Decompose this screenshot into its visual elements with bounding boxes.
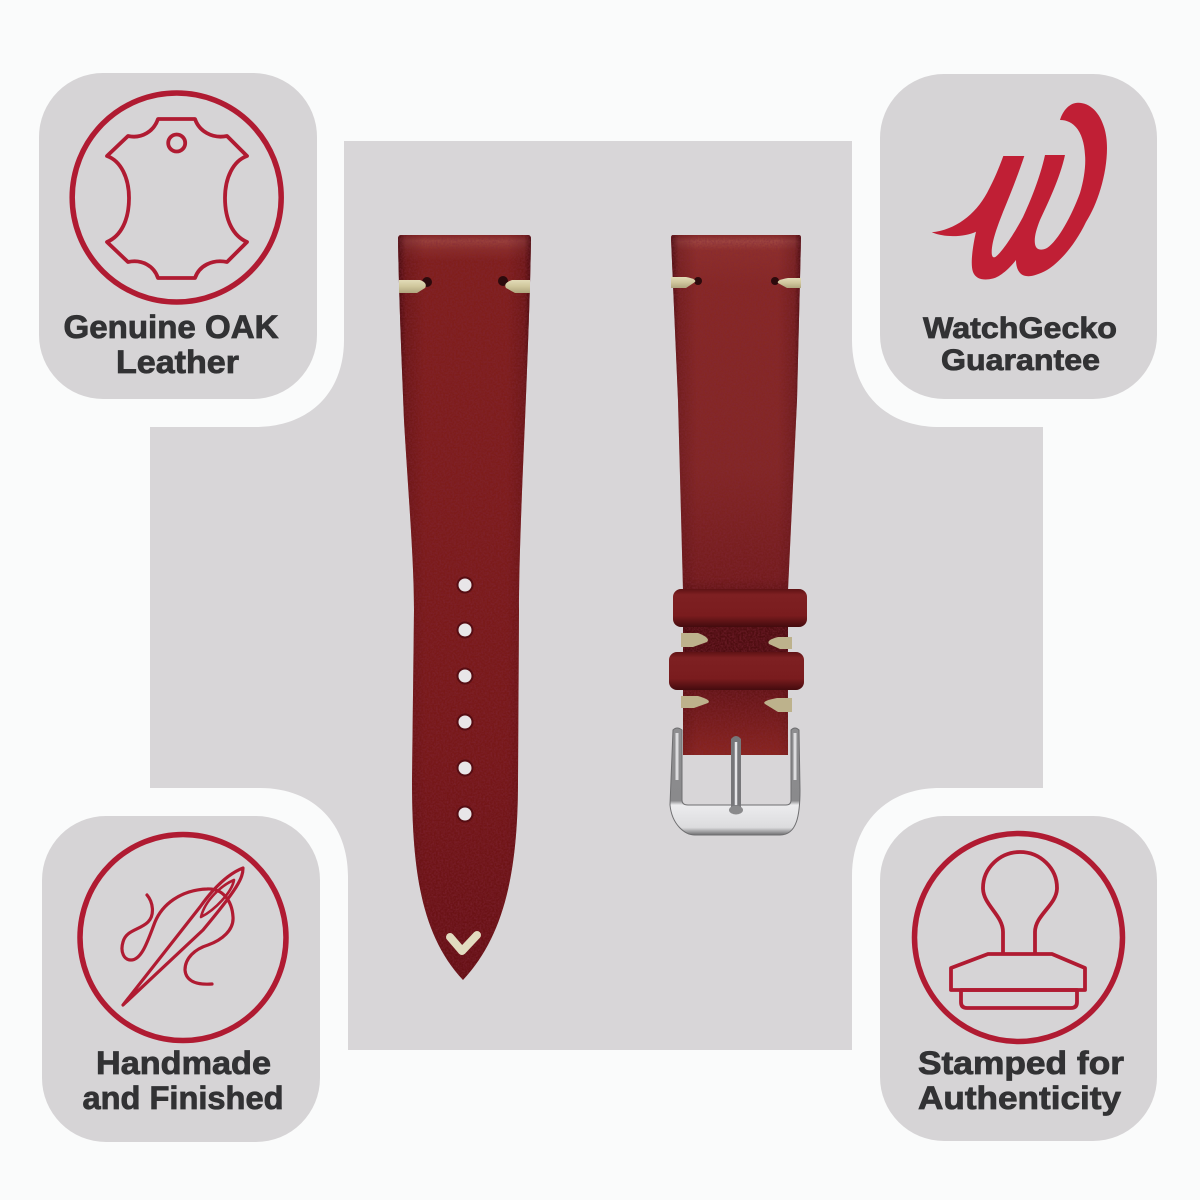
heading: Stamped for Authenticity: Authenticity [918,1080,1121,1116]
keeper: lower [669,652,804,690]
stitches: under keepers [681,633,792,712]
stitch: left top [399,277,432,293]
icon: WatchGecko W logo [932,103,1107,279]
heading: Stamped for Authenticity [918,1045,1124,1116]
stitch: right top [498,276,530,293]
panel: WatchGecko guarantee [880,74,1157,399]
stitch: top right [771,277,801,288]
strap holes [458,578,472,822]
heading: Genuine OAK Leather: Genuine OAK [64,309,278,345]
keeper: upper [673,589,807,627]
panel: handmade and finished [42,816,320,1142]
icon: rubber stamp in circle [914,834,1122,1042]
buckle frame [670,728,800,835]
illustration: buckle strap piece [669,235,807,835]
icon: leather hide in circle [72,93,281,302]
panel: genuine oak leather [39,73,317,399]
heading: WatchGecko Guarantee: Guarantee [941,344,1100,377]
icon: needle and thread in circle [80,834,286,1040]
heading: Handmade and Finished [82,1045,284,1116]
heading: WatchGecko Guarantee: WatchGecko [923,312,1117,345]
heading: Genuine OAK Leather [64,309,278,380]
stitch: top left [671,277,702,288]
panel: stamped for authenticity [880,816,1157,1141]
heading: Handmade and Finished: and Finished [82,1080,284,1116]
heading: WatchGecko Guarantee [923,312,1117,377]
buckle pin [729,736,743,814]
illustration: long strap piece [398,235,531,980]
panel: central backdrop [150,141,1043,1050]
heading: Genuine OAK Leather: Leather [116,344,239,380]
stitch: V tip [450,935,477,951]
heading: Handmade and Finished: Handmade [96,1045,271,1081]
heading: Stamped for Authenticity: Stamped for [918,1045,1124,1081]
